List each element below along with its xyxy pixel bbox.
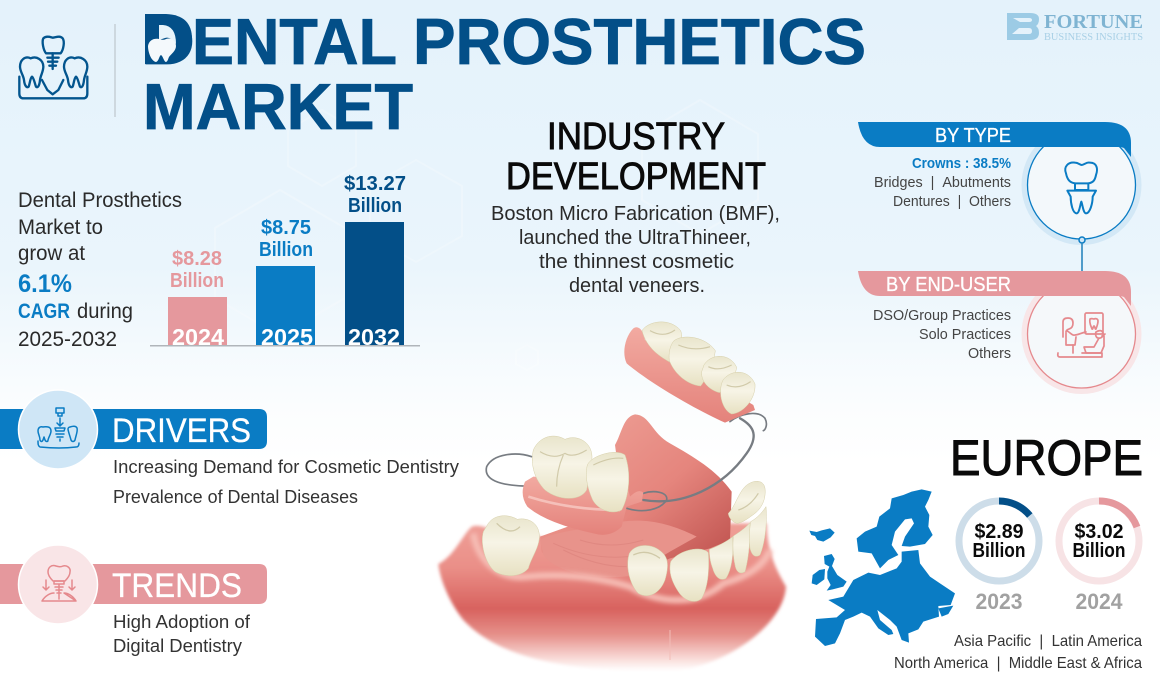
bar chart: $13.27 bbox=[344, 173, 406, 195]
market growth text: grow at bbox=[18, 242, 85, 265]
logo mark bbox=[1007, 13, 1039, 40]
market growth text bbox=[18, 189, 182, 351]
panel: drivers: Increasing Demand for Cosmetic Dentistry bbox=[113, 457, 459, 477]
heading bar: drivers bbox=[0, 409, 267, 449]
logo: Fortune Business Insights: FORTUNE bbox=[1044, 11, 1143, 33]
market growth text: Dental Prosthetics bbox=[18, 189, 182, 212]
title bbox=[141, 5, 866, 143]
bar chart: Billion bbox=[259, 239, 313, 261]
icon circle: drivers bbox=[18, 390, 98, 469]
panel: trends bbox=[0, 545, 267, 656]
market growth text: 6.1% bbox=[18, 270, 72, 298]
icon circle: trends bbox=[18, 545, 98, 624]
palate bbox=[540, 414, 732, 577]
icon: dental crown bbox=[1065, 162, 1097, 213]
lower jaw gum bbox=[438, 523, 786, 671]
upper partial denture bbox=[624, 322, 755, 423]
panel: by type: Dentures | Others bbox=[893, 193, 1011, 210]
panel: trends: Digital Dentistry bbox=[113, 636, 242, 656]
panel: by type bbox=[858, 122, 1142, 245]
market growth text: Market to bbox=[18, 216, 103, 239]
wire clasps bbox=[486, 414, 766, 511]
panel: by end-user: Others bbox=[968, 345, 1011, 362]
industry development: Boston Micro Fabrication (BMF), bbox=[491, 203, 780, 225]
panel: drivers bbox=[0, 390, 459, 507]
left partial denture bbox=[523, 436, 643, 535]
panel: by type: Crowns : 38.5% bbox=[912, 155, 1011, 172]
industry development bbox=[491, 116, 780, 297]
market growth text: 2025-2032 bbox=[18, 328, 117, 351]
gum highlight bbox=[473, 533, 770, 600]
panel: by end-user: Solo Practices bbox=[919, 326, 1011, 343]
donut: 2023: $2.89 bbox=[974, 521, 1024, 543]
title: ENTAL bbox=[192, 5, 397, 78]
title: PROSTHETICS bbox=[413, 5, 866, 78]
scandinavia bbox=[857, 489, 933, 568]
region heading: europe: EUROPE bbox=[950, 430, 1143, 486]
donut: 2024: 2024 bbox=[1076, 589, 1123, 614]
ireland bbox=[812, 569, 825, 585]
divider bbox=[114, 24, 116, 117]
tongue floor bbox=[540, 521, 697, 577]
market growth text: CAGR bbox=[18, 300, 70, 323]
other regions: North America | Middle East & Africa bbox=[894, 655, 1142, 672]
heading banner: by type bbox=[858, 122, 1131, 157]
bar chart: Billion bbox=[348, 195, 402, 217]
heading banner: by end-user bbox=[858, 271, 1131, 306]
bar chart: Billion bbox=[170, 270, 224, 292]
bar chart: 2024 bbox=[172, 324, 224, 350]
connector bbox=[1079, 237, 1085, 272]
crimea bbox=[938, 606, 953, 617]
industry development: the thinnest cosmetic bbox=[539, 251, 734, 273]
bar chart: 2032 bbox=[348, 324, 400, 350]
britain bbox=[824, 554, 847, 591]
bar chart: $8.75 bbox=[261, 217, 311, 239]
donut: 2024: Billion bbox=[1072, 540, 1126, 562]
illustration: partial denture bbox=[438, 322, 786, 671]
donut: 2024 bbox=[1059, 501, 1139, 614]
panel: by end-user: BY END-USER bbox=[886, 273, 1011, 296]
panel: trends: High Adoption of bbox=[113, 612, 251, 632]
panel: trends: TRENDS bbox=[112, 567, 242, 605]
industry development: dental veneers. bbox=[569, 275, 705, 297]
logo: Fortune Business Insights bbox=[1007, 11, 1143, 43]
industry development: INDUSTRY bbox=[547, 116, 725, 158]
donut: 2023: Billion bbox=[972, 540, 1026, 562]
panel: by end-user: DSO/Group Practices bbox=[873, 307, 1011, 324]
other regions: Asia Pacific | Latin America bbox=[954, 633, 1142, 650]
title: MARKET bbox=[143, 70, 413, 143]
donut: 2023: 2023 bbox=[976, 589, 1022, 614]
panel: by type: Bridges | Abutments bbox=[874, 174, 1011, 191]
donut: 2024: $3.02 bbox=[1074, 521, 1124, 543]
bar chart: $8.28 bbox=[172, 248, 222, 270]
donut: 2023 bbox=[959, 501, 1039, 614]
title: D bbox=[141, 5, 195, 78]
bar chart: 2025 bbox=[261, 324, 313, 350]
panel: drivers: Prevalence of Dental Diseases bbox=[113, 487, 358, 507]
market growth text: during bbox=[77, 300, 133, 323]
icon: dentist with patient bbox=[1058, 313, 1105, 357]
iceland bbox=[809, 528, 835, 542]
bar chart bbox=[150, 173, 420, 350]
industry development: DEVELOPMENT bbox=[506, 156, 766, 198]
icon: dental implant bbox=[19, 37, 87, 98]
panel: by type: BY TYPE bbox=[935, 124, 1011, 147]
lower teeth bbox=[482, 481, 766, 601]
map: europe bbox=[809, 489, 955, 646]
mainland bbox=[815, 550, 955, 646]
icon: tooth in letter D bbox=[145, 14, 192, 64]
panel: drivers: DRIVERS bbox=[112, 412, 251, 450]
heading bar: trends bbox=[0, 564, 267, 604]
logo: Fortune Business Insights: BUSINESS INSIGHTS bbox=[1044, 32, 1143, 43]
industry development: launched the UltraThineer, bbox=[519, 227, 751, 249]
panel: by end-user bbox=[858, 271, 1142, 394]
other regions bbox=[894, 633, 1142, 672]
